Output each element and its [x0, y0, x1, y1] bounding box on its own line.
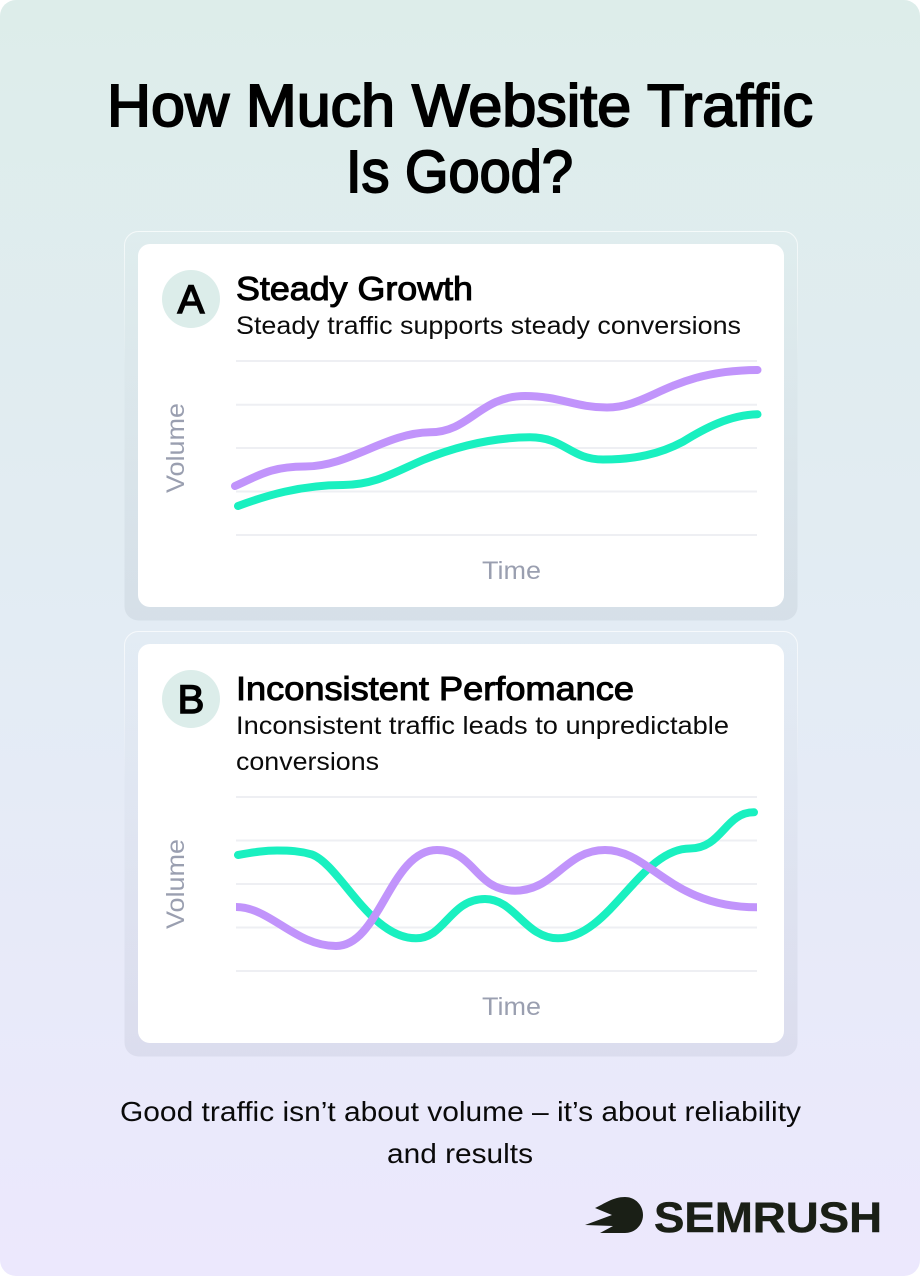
title: Is Good? [346, 139, 573, 205]
icon: comet [585, 1197, 643, 1233]
subtitle A: Steady traffic supports steady conversions [236, 312, 741, 340]
axis label: volume A: Volume [162, 403, 190, 493]
heading B: Inconsistent Perfomance [236, 670, 634, 707]
title: How Much Website Traffic [107, 73, 813, 139]
badge A [162, 270, 220, 328]
panel A: steady growth [124, 232, 798, 620]
title [107, 73, 813, 205]
chart A lines [235, 370, 758, 506]
badge B: B [178, 678, 204, 722]
subtitle B: Inconsistent traffic leads to unpredictable [236, 712, 729, 740]
footer text: Good traffic isn’t about volume – it’s about reliability [120, 1096, 801, 1127]
chart B lines [236, 812, 757, 946]
footer text: and results [387, 1138, 533, 1169]
heading A: Steady Growth [236, 270, 473, 307]
panel B: inconsistent performance [124, 632, 798, 1056]
subtitle B [236, 712, 729, 776]
logo: semrush: SEMRUSH [654, 1194, 882, 1242]
footer text [120, 1096, 801, 1169]
badge A: A [178, 278, 205, 322]
axis label: volume B: Volume [162, 839, 190, 929]
subtitle B: conversions [236, 748, 379, 776]
axis label: time A: Time [482, 557, 541, 585]
axis label: time B: Time [482, 993, 541, 1021]
badge B [162, 670, 220, 728]
